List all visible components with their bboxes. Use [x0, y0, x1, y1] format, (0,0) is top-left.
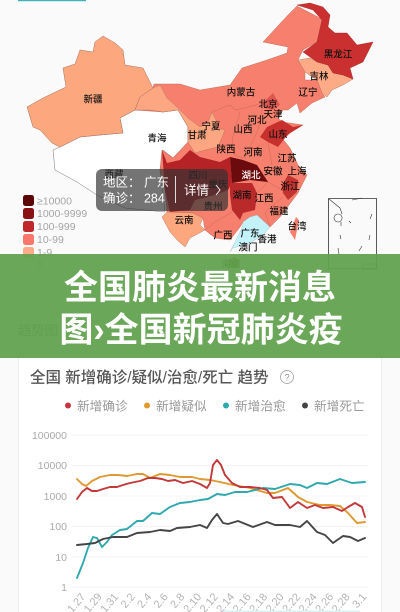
province labels: 甘肃: [187, 130, 207, 142]
province labels: 吉林: [309, 70, 329, 82]
region: Yunnan: [162, 212, 205, 247]
province labels: 四川: [188, 170, 208, 182]
line: confirmed: [77, 460, 365, 517]
faint bottom line: [223, 610, 360, 612]
region: Zhejiang: [282, 175, 298, 200]
map tooltip: 确诊： 284: [103, 192, 165, 206]
province labels: 广西: [213, 230, 233, 242]
chart legend: 新增疑似: [156, 398, 207, 414]
province labels: 浙江: [280, 180, 300, 192]
x axis: [65, 591, 369, 612]
region: Sichuan and Chongqing: [162, 150, 232, 212]
province labels: 海南: [221, 258, 241, 270]
province labels: 上海: [287, 166, 307, 178]
province labels: 云南: [174, 214, 194, 226]
map tooltip: 详情: [184, 182, 209, 198]
province labels: 天津: [263, 110, 283, 120]
title banner: [0, 254, 400, 358]
province labels: 辽宁: [298, 86, 318, 98]
province labels: 安徽: [263, 166, 283, 178]
inset: South China Sea: [328, 198, 377, 269]
title text: 全国肺炎最新消息: [64, 269, 336, 307]
chart legend: [65, 398, 365, 414]
province labels: 河南: [243, 146, 263, 158]
x axis: 2.4: [135, 591, 154, 611]
map legend: 0: [37, 259, 43, 271]
faded section heading: 趋势图: [18, 323, 58, 338]
y axis: 1000: [44, 491, 67, 503]
chart title: 全国 新增确诊/疑似/治愈/死亡 趋势: [30, 368, 269, 386]
y axis: [32, 430, 67, 594]
province labels: [83, 48, 353, 270]
province labels: 宁夏: [201, 120, 221, 132]
map legend: 10-99: [37, 234, 64, 246]
top teal bar: [18, 0, 86, 1]
region: Heilongjiang: [297, 3, 373, 79]
province labels: 青海: [147, 132, 167, 144]
map tooltip: 地区： 广东: [103, 176, 169, 190]
title text: 图›全国新冠肺炎疫: [59, 312, 343, 350]
province labels: 陕西: [216, 144, 236, 156]
province labels: 黑龙江: [324, 48, 353, 60]
map legend: 100-999: [37, 221, 76, 233]
province labels: 新疆: [83, 94, 103, 106]
y axis: 10: [55, 552, 67, 564]
map legend: [23, 195, 87, 271]
icon: help: ?: [284, 372, 290, 384]
x axis: 2.6: [152, 591, 171, 611]
region: Hunan: [230, 183, 257, 220]
province labels: 江苏: [277, 152, 297, 164]
province labels: 重庆: [208, 178, 228, 190]
province labels: 湖北: [241, 170, 261, 182]
region: Tibet and Qinghai: [53, 110, 188, 212]
title text: [59, 269, 343, 350]
trend chart card: [18, 354, 382, 612]
province labels: 福建: [269, 206, 289, 218]
line: suspected: [77, 474, 365, 523]
map legend: 1000-9999: [37, 208, 87, 220]
y axis: 1: [61, 582, 67, 594]
province labels: 内蒙古: [227, 86, 256, 98]
province labels: 贵州: [203, 200, 223, 212]
province labels: 台湾: [287, 220, 307, 232]
region: Xinjiang: [27, 36, 153, 147]
province labels: 山东: [268, 128, 288, 140]
x axis: 3.1: [350, 591, 369, 611]
province labels: 西藏: [104, 168, 124, 180]
region: Gansu and Ningxia: [135, 85, 225, 153]
province labels: 山西: [233, 124, 253, 136]
china map: [27, 3, 377, 270]
region: Shandong: [260, 120, 303, 147]
province labels: 广东: [240, 228, 260, 240]
map legend: ≥10000: [37, 196, 72, 208]
x axis: 2.2: [119, 591, 138, 611]
region: central and eastern provinces: [135, 6, 325, 240]
region: Hainan: [228, 257, 240, 268]
y axis: 10000: [38, 460, 67, 472]
province labels: 河北: [247, 114, 267, 126]
province labels: 湖南: [232, 190, 252, 202]
region: Beijing: [262, 93, 280, 110]
line: cured: [77, 479, 365, 578]
chart legend: 新增治愈: [235, 398, 286, 414]
y axis: 100: [49, 521, 67, 533]
chart legend: 新增死亡: [314, 398, 365, 414]
region: Taiwan: [290, 217, 299, 240]
region: Jilin: [298, 58, 353, 97]
icon: help: [280, 370, 294, 384]
province labels: 香港: [257, 234, 277, 246]
map legend: 1-9: [37, 247, 52, 259]
map tooltip: [96, 169, 228, 211]
province labels: 北京: [258, 98, 278, 110]
region: Guangdong: [230, 215, 270, 252]
province labels: 澳门: [238, 242, 258, 254]
chart legend: 新增确诊: [77, 398, 128, 414]
line: deaths: [77, 514, 365, 545]
province labels: 江西: [254, 192, 274, 204]
region: Hubei: [230, 157, 268, 183]
y axis: 100000: [32, 430, 67, 442]
x axis: 2.8: [168, 591, 187, 611]
